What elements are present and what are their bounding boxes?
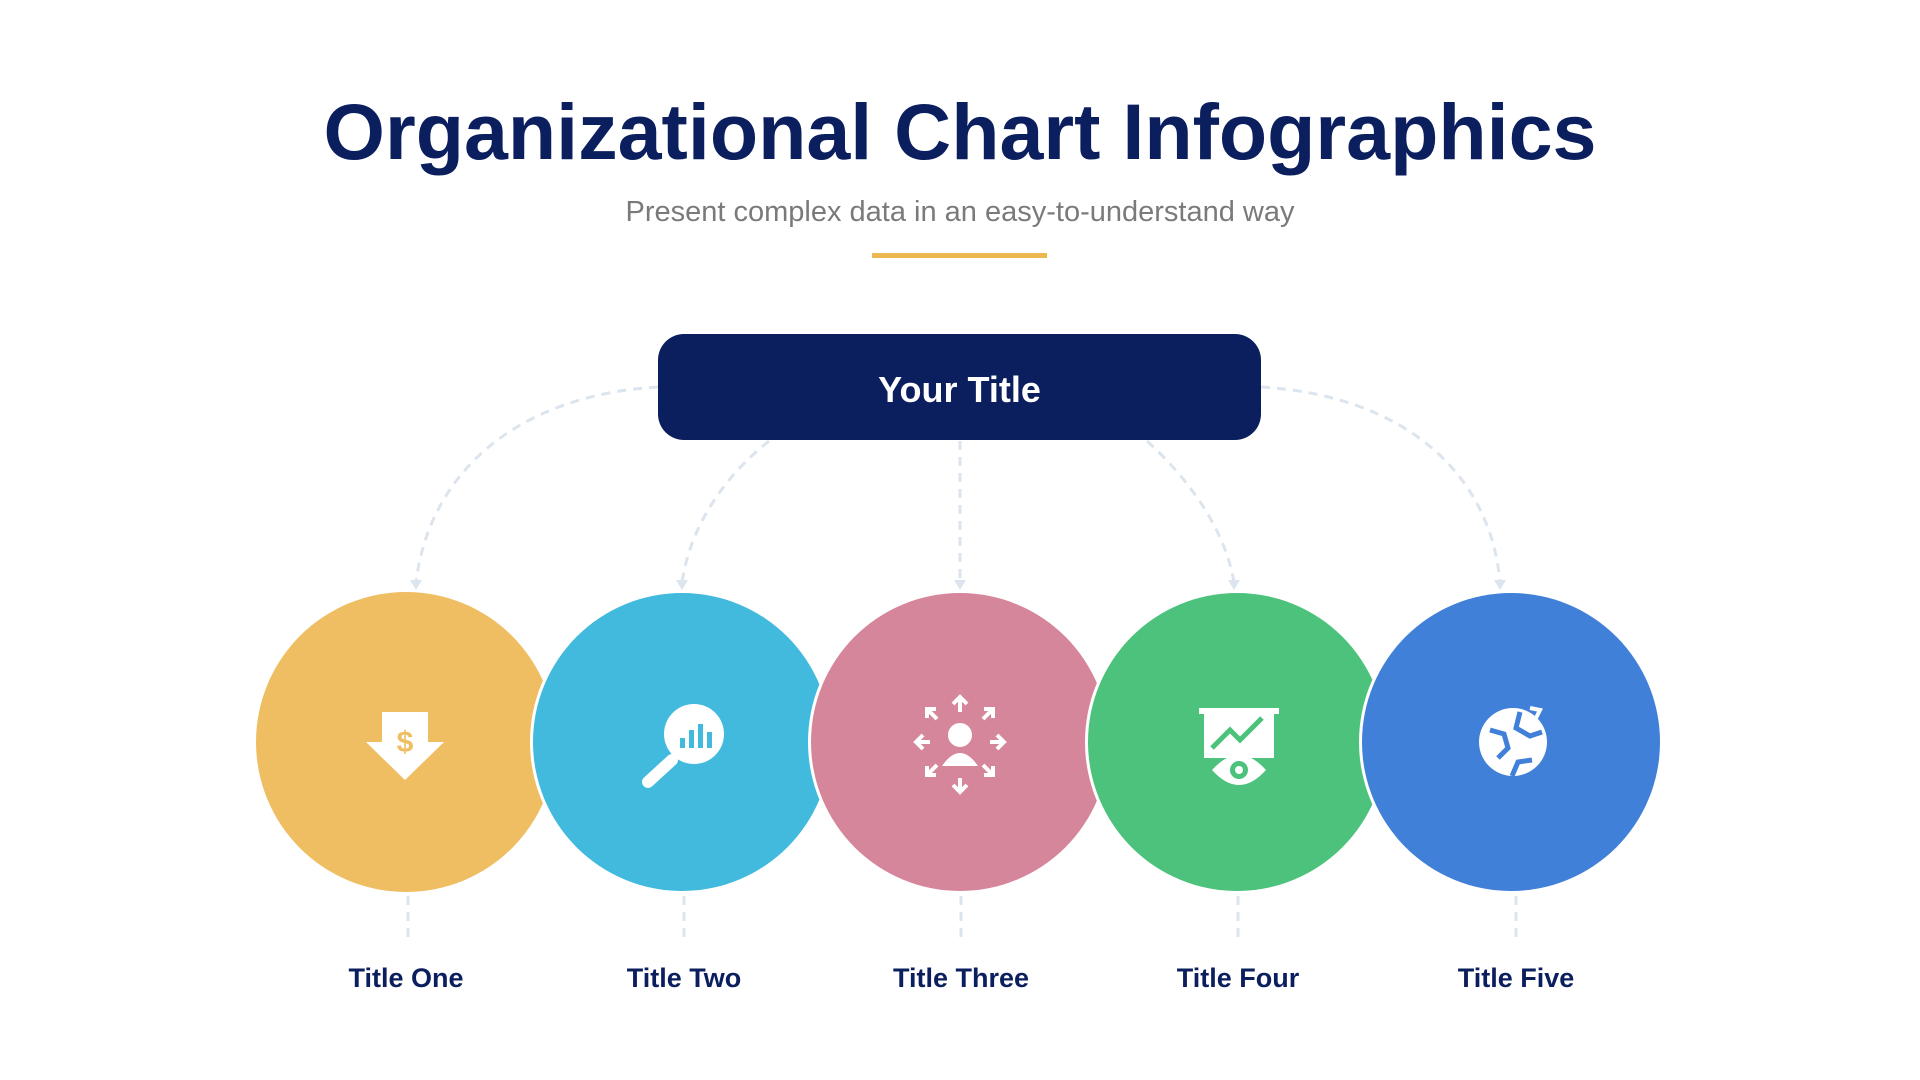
label 3: Title Three xyxy=(893,963,1029,993)
label 2: Title Two xyxy=(627,963,741,993)
circle 3 xyxy=(808,590,1112,894)
icon: globe xyxy=(1479,708,1547,776)
top box: Your Title: Your Title xyxy=(878,369,1041,410)
top box: Your Title xyxy=(658,334,1261,440)
circle 2 xyxy=(530,590,834,894)
label 5: Title Five xyxy=(1458,963,1574,993)
title: Organizational Chart Infographics xyxy=(324,87,1596,176)
label 1: Title One xyxy=(348,963,464,993)
icon: search chart xyxy=(648,704,724,782)
icon: dollar down xyxy=(366,712,444,780)
icon: presentation eye xyxy=(1199,708,1279,785)
labels xyxy=(348,963,1574,993)
circle 1 xyxy=(256,592,556,892)
accent line xyxy=(872,253,1047,258)
icon: dollar down: $ xyxy=(397,726,414,759)
circle 4 xyxy=(1085,590,1389,894)
circle 5 xyxy=(1359,590,1663,894)
subtitle: Present complex data in an easy-to-understand way xyxy=(626,196,1294,228)
icon: person with arrows xyxy=(916,697,1004,792)
label 4: Title Four xyxy=(1177,963,1299,993)
